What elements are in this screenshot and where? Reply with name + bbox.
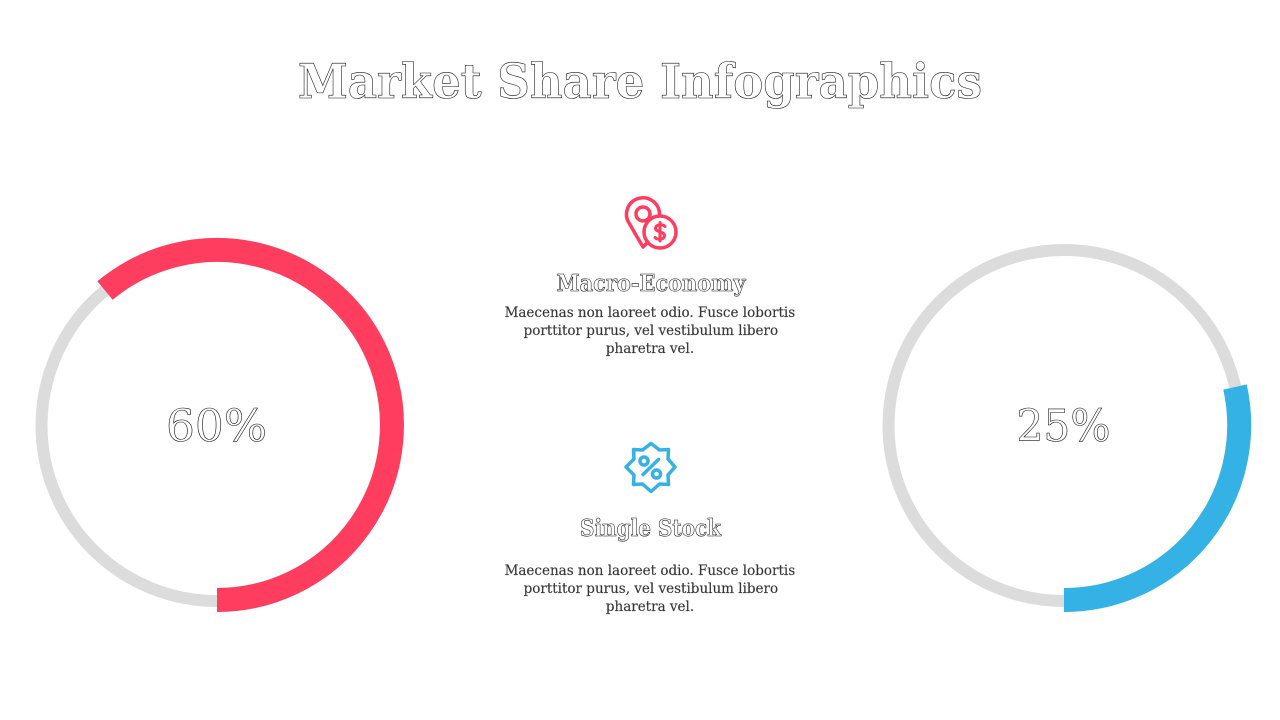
- donut value arc: [105, 250, 392, 600]
- value label 60%: 60%: [166, 401, 267, 452]
- icon: percent badge: [626, 444, 675, 492]
- donut track: [42, 250, 392, 601]
- heading: Macro-Economy: [556, 270, 746, 297]
- title: Market Share Infographics: [298, 54, 982, 110]
- description: pharetra vel.: [606, 341, 694, 357]
- icon: map pin with dollar coin: [627, 198, 676, 248]
- panel: single stock: [505, 444, 799, 615]
- heading: Single Stock: [580, 515, 722, 542]
- panel: macro-economy: [505, 198, 799, 357]
- description: pharetra vel.: [606, 599, 694, 615]
- donut value arc: [1064, 387, 1239, 600]
- panel: left donut chart 60%: [42, 250, 392, 601]
- description: Maecenas non laoreet odio. Fusce lobortis: [505, 305, 795, 321]
- panel: right donut chart 25%: [888, 250, 1240, 601]
- value label 25%: 25%: [1016, 401, 1110, 452]
- description: porttitor purus, vel vestibulum libero: [524, 323, 778, 339]
- description: Maecenas non laoreet odio. Fusce lobortis: [505, 563, 795, 579]
- description: porttitor purus, vel vestibulum libero: [524, 581, 778, 597]
- donut track: [888, 250, 1240, 601]
